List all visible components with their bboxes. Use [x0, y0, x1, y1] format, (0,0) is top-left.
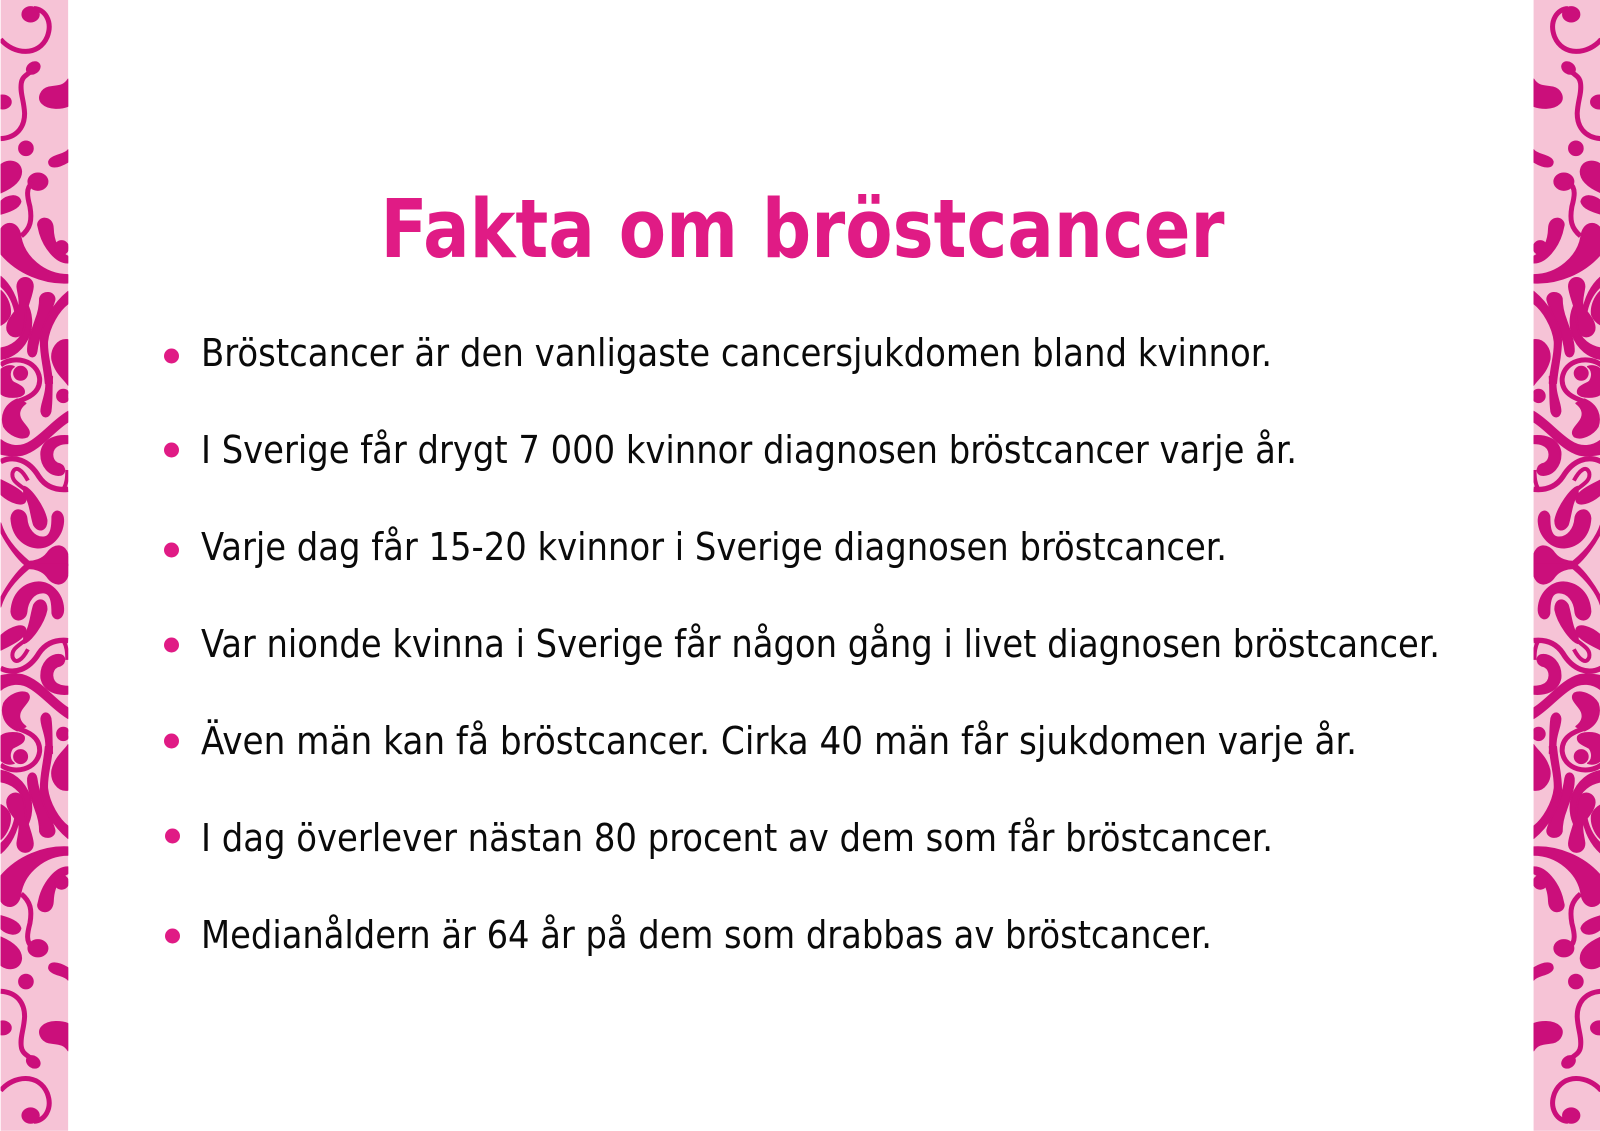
panel: right decorative border: [1532, 0, 1600, 1131]
panel: left decorative border: [0, 0, 70, 1131]
bullet list: facts: [164, 331, 1440, 957]
fact 7: Medianåldern är 64 år på dem som drabbas av bröstcancer.: [201, 913, 1212, 957]
fact 3: Varje dag får 15-20 kvinnor i Sverige diagnosen bröstcancer.: [201, 525, 1227, 569]
fact 2: I Sverige får drygt 7 000 kvinnor diagnosen bröstcancer varje år.: [201, 428, 1297, 472]
title: Fakta om bröstcancer: [380, 183, 1225, 277]
fact 6: I dag överlever nästan 80 procent av dem som får bröstcancer.: [201, 816, 1273, 860]
fact 4: Var nionde kvinna i Sverige får någon gång i livet diagnosen bröstcancer.: [201, 622, 1440, 666]
fact 1: Bröstcancer är den vanligaste cancersjukdomen bland kvinnor.: [201, 331, 1272, 375]
fact 5: Även män kan få bröstcancer. Cirka 40 män får sjukdomen varje år.: [201, 719, 1357, 763]
